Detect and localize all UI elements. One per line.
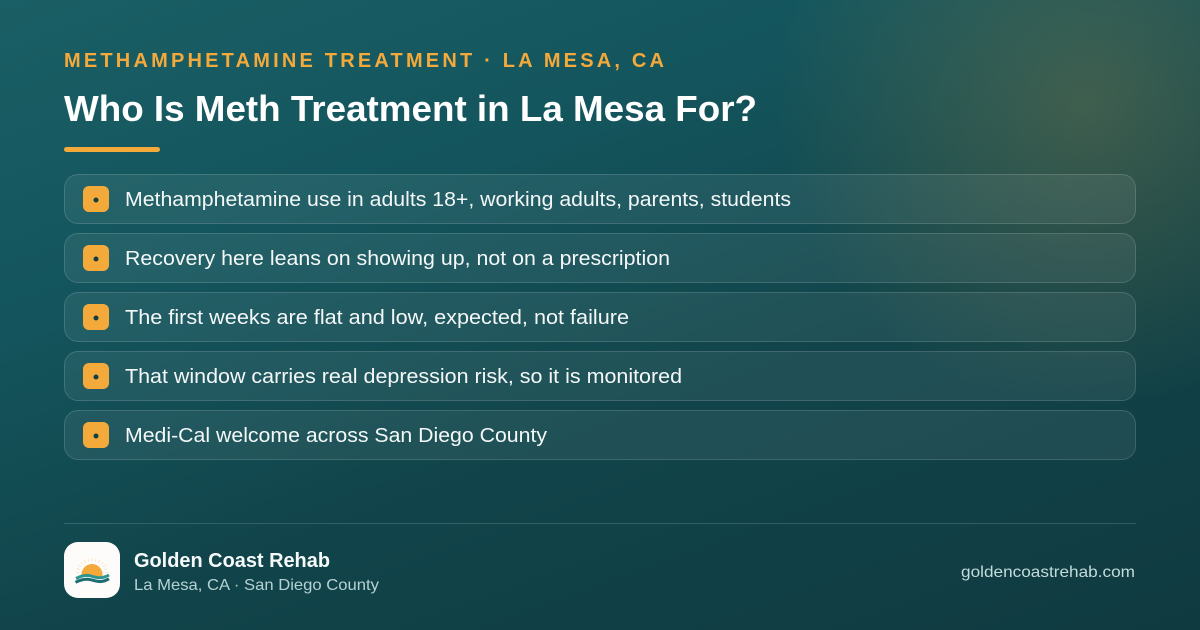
- logo badge: [64, 542, 120, 598]
- item 2: Recovery here leans on showing up, not on a prescription: [125, 248, 670, 270]
- title: Who Is Meth Treatment in La Mesa For?: [64, 88, 757, 129]
- website: goldencoastrehab.com: [961, 564, 1135, 581]
- item 4: [64, 352, 1136, 400]
- item 5: [64, 410, 1136, 460]
- item 5: Medi-Cal welcome across San Diego County: [125, 425, 547, 447]
- brand name: Golden Coast Rehab: [134, 550, 330, 572]
- brand location: La Mesa, CA · San Diego County: [134, 577, 379, 594]
- accent bar: [64, 147, 160, 152]
- icon: sun rays: [76, 558, 108, 573]
- icon: sun: [82, 564, 102, 577]
- item 1: [64, 174, 1136, 224]
- eyebrow: METHAMPHETAMINE TREATMENT · LA MESA, CA: [64, 50, 664, 72]
- icon: waves: [76, 575, 109, 582]
- item 3: [64, 292, 1136, 342]
- item 2: [64, 234, 1136, 282]
- item 1: Methamphetamine use in adults 18+, working adults, parents, students: [125, 189, 791, 211]
- item 4: That window carries real depression risk, so it is monitored: [125, 366, 682, 388]
- item 3: The first weeks are flat and low, expected, not failure: [125, 307, 629, 329]
- list of audience items: [64, 174, 1136, 460]
